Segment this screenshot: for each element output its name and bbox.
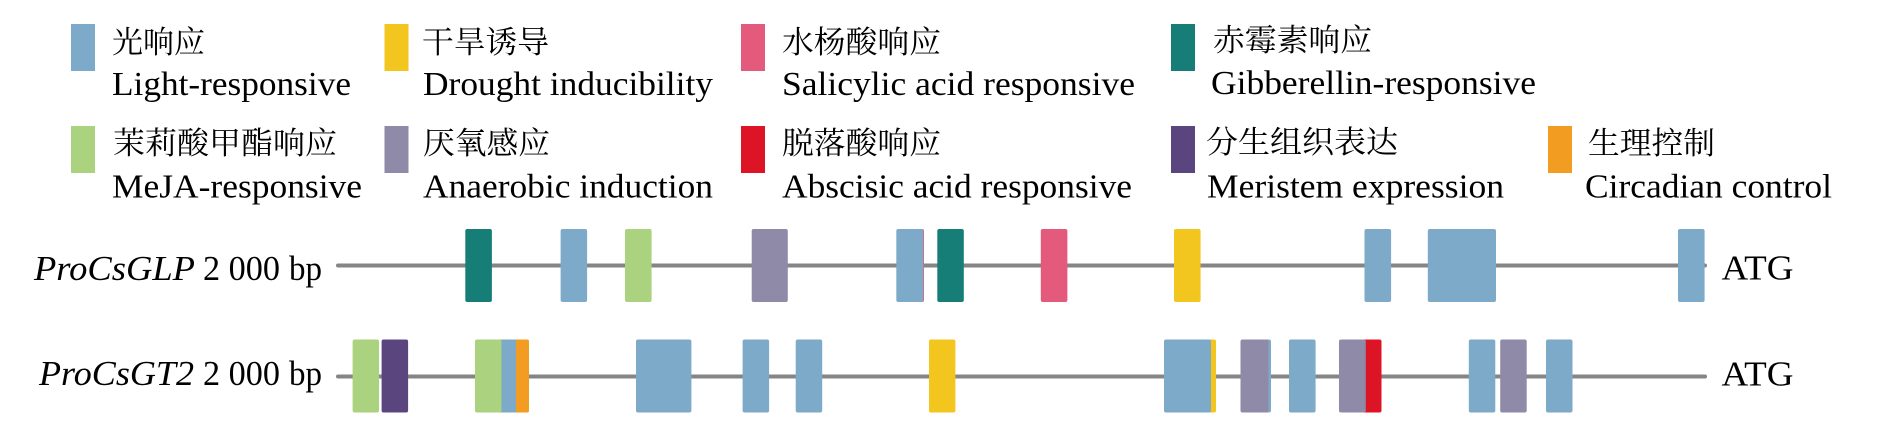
gene label: ProCsGT2: 2 000 [203,354,280,393]
legend item: MeJA-responsive: MeJA-responsive [112,168,362,206]
promoter line [336,264,1707,268]
legend item: gibberellin-responsive: Gibberellin-responsive [1211,65,1536,102]
legend item: circadian control [1548,126,1832,206]
legend item: gibberellin-responsive [1171,23,1536,102]
legend [71,23,1832,206]
gene label: ProCsGT2: ProCsGT2 [38,354,194,393]
track: ProCsGLP promoter [33,229,1794,302]
cis-element boxes [465,229,1705,302]
end label: ATG: ATG [1722,354,1794,394]
legend item: anaerobic induction: 厌氧感应 [423,126,550,161]
legend item: light-responsive [71,24,351,103]
gene label: ProCsGLP: 2 000 [203,249,280,288]
legend item: drought inducibility: Drought inducibility [423,66,713,103]
legend item: anaerobic induction [384,126,713,206]
legend item: abscisic acid responsive: Abscisic acid responsive [782,168,1132,206]
legend item: anaerobic induction: Anaerobic induction [423,168,713,206]
legend item: MeJA-responsive [71,126,362,206]
legend item: abscisic acid responsive: 脱落酸响应 [782,126,941,161]
legend item: meristem expression [1171,125,1504,206]
legend item: abscisic acid responsive [741,126,1132,206]
legend item: salicylic acid responsive [741,24,1135,103]
legend item: meristem expression: 分生组织表达 [1206,125,1398,160]
legend item: salicylic acid responsive: 水杨酸响应 [782,25,941,60]
cis-element boxes [353,340,1573,412]
gene label: ProCsGT2 [38,354,322,393]
legend item: drought inducibility [384,24,713,103]
legend item: circadian control: Circadian control [1585,168,1832,206]
legend item: light-responsive: Light-responsive [112,66,351,103]
track: ProCsGT2 promoter [38,340,1793,412]
legend item: meristem expression: Meristem expression [1207,168,1504,206]
gene label: ProCsGT2: bp [289,354,322,393]
legend item: light-responsive: 光响应 [112,25,205,60]
legend item: gibberellin-responsive: 赤霉素响应 [1213,23,1372,58]
gene label: ProCsGLP [33,249,322,288]
legend item: salicylic acid responsive: Salicylic acid responsive [782,66,1135,103]
legend item: circadian control: 生理控制 [1588,126,1715,161]
promoter line [336,374,1707,378]
legend item: MeJA-responsive: 茉莉酸甲酯响应 [113,126,337,161]
legend item: drought inducibility: 干旱诱导 [422,25,549,60]
gene label: ProCsGLP: ProCsGLP [33,249,195,288]
gene label: ProCsGLP: bp [289,249,322,288]
end label: ATG: ATG [1722,248,1794,288]
